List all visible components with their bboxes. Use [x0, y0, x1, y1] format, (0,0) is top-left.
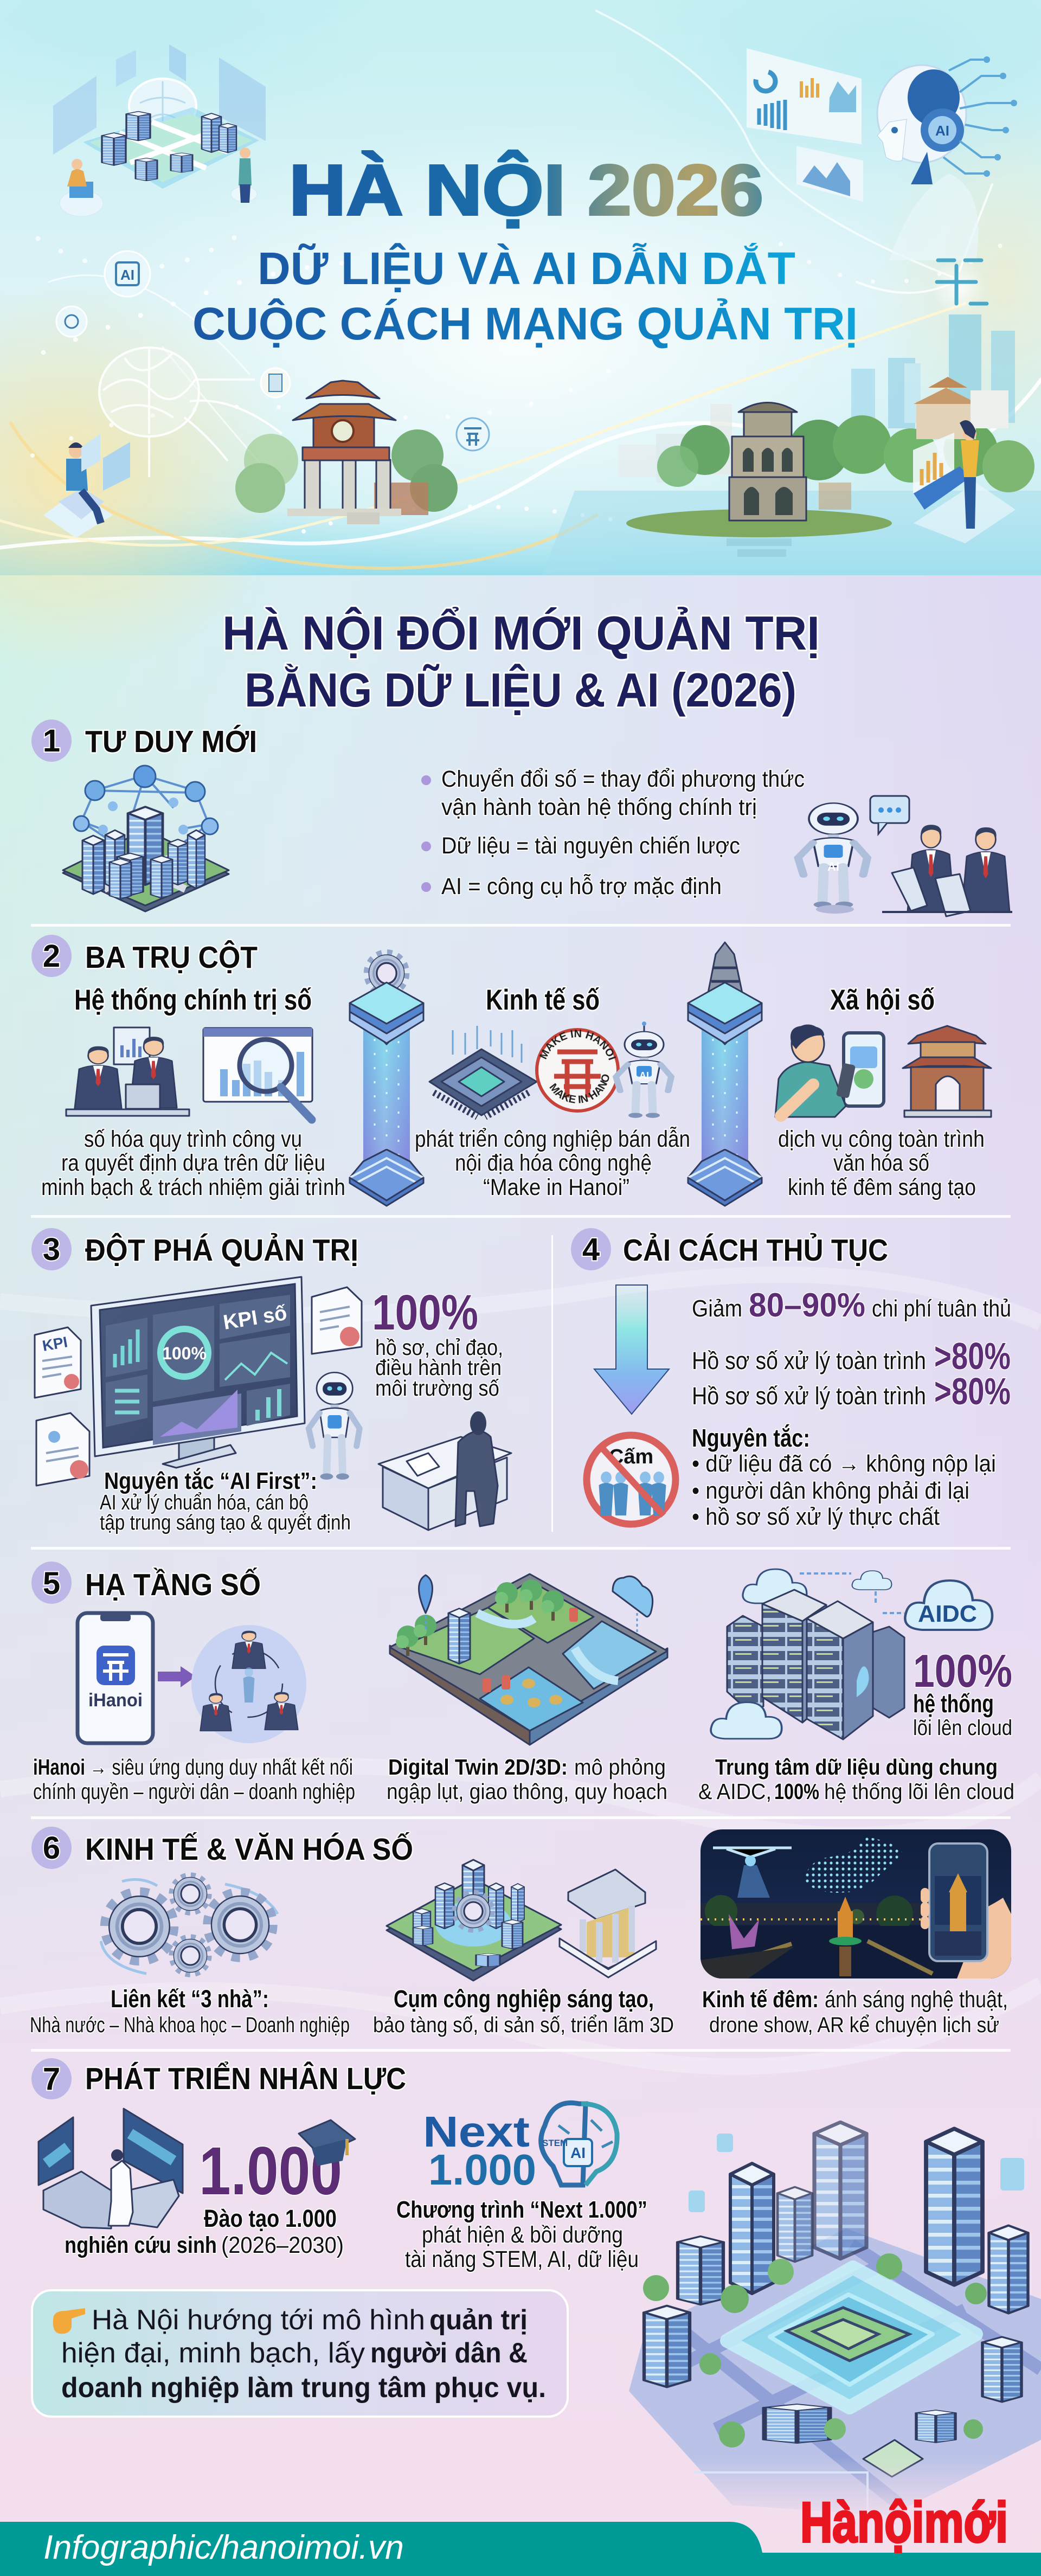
column 1: Hệ thống chính trị số — [41, 984, 345, 1200]
caption: Digital Twin: mô phỏng — [574, 1755, 666, 1780]
icon: digital twin city map — [390, 1574, 667, 1745]
stamp: Make in Hanoi: MAKE IN HANOI — [539, 1030, 616, 1061]
caption: night economy — [702, 1987, 1008, 2037]
subheading: Kinh tế số — [486, 984, 600, 1016]
subheading: Xã hội số — [830, 984, 935, 1016]
section 6: Kinh tế & văn hóa số — [30, 1827, 1011, 2037]
icon: chart window with magnifier — [203, 1028, 312, 1120]
description: số hóa quy trình công vụ — [84, 1126, 302, 1152]
icon: digital museum — [560, 1870, 656, 1977]
section 5: Hạ tầng số — [31, 1562, 1014, 1804]
hero skyscrapers — [851, 314, 1015, 428]
heading 1 — [31, 720, 257, 762]
hero water and Turtle Tower — [542, 377, 1041, 575]
stat: 100%: môi trường số — [375, 1376, 499, 1401]
heading 5: 5 — [43, 1566, 60, 1601]
main heading: BẰNG DỮ LIỆU & AI (2026) — [245, 663, 796, 717]
text: AI First principle: tập trung sáng tạo & quyết định — [100, 1511, 351, 1534]
footer credit: Infographic/hanoimoi.vn — [43, 2529, 404, 2566]
photo: night economy at Hoan Kiem lake — [701, 1829, 1011, 1978]
description — [41, 1126, 345, 1200]
description: văn hóa số — [833, 1150, 929, 1176]
icon: prohibition sign: Cấm — [609, 1446, 653, 1468]
caption: iHanoi: iHanoi — [33, 1755, 85, 1780]
bullet list — [421, 766, 805, 900]
heading 3 — [31, 1228, 358, 1270]
text: AI First principle: AI xử lý chuẩn hóa, cán bộ — [100, 1491, 309, 1514]
caption: Next 1.000 program: Chương trình “Next 1.000” — [396, 2196, 647, 2223]
bullet list: Chuyển đổi số = thay đổi phương thức — [441, 766, 805, 792]
stat: 100%: điều hành trên — [375, 1355, 502, 1380]
caption: data centre: hệ thống lõi lên cloud — [824, 1779, 1014, 1804]
hero subtitle line 2: CUỘC CÁCH MẠNG QUẢN TRỊ — [192, 298, 858, 349]
stat: digital records line 2: Hồ sơ số xử lý toàn trình — [692, 1382, 926, 1410]
description — [778, 1126, 985, 1200]
cloud badge: AIDC: AIDC — [918, 1601, 977, 1627]
hero illustration: smart city platform with brain — [53, 44, 266, 189]
icon: robot beside monitor — [309, 1372, 359, 1480]
icon: data centre servers and clouds — [711, 1569, 992, 1739]
icon: officer at desk — [378, 1411, 511, 1530]
stat: 1.000 PhD candidates: 1.000 — [199, 2134, 342, 2209]
caption: Digital Twin: Digital Twin 2D/3D: — [388, 1755, 568, 1780]
vertical divider — [551, 1235, 553, 1532]
hero title: HÀ NỘI 2026: HÀ NỘI 2026 — [289, 150, 763, 230]
stat: 1.000 PhD candidates: Đào tạo 1.000 — [204, 2205, 337, 2232]
hero small floating icons: AI — [120, 267, 134, 283]
callout: conclusion: doanh nghiệp làm trung tâm phục vụ. — [61, 2372, 546, 2404]
illustration: smart city — [629, 2122, 1041, 2516]
text: principles: Nguyên tắc: — [692, 1424, 810, 1452]
stat: 100% core systems on cloud: lõi lên cloud — [913, 1716, 1012, 1740]
section 2: Ba trụ cột — [31, 935, 992, 1207]
hero flowing light ribbons — [0, 11, 1041, 568]
description: ra quyết định dựa trên dữ liệu — [61, 1150, 325, 1176]
text: principles: • dữ liệu đã có → không nộp lại — [692, 1450, 996, 1477]
hero person with tablet, bottom right — [913, 420, 1016, 543]
main heading — [222, 606, 820, 717]
heading 2 — [31, 935, 258, 977]
stat: compliance cost — [692, 1287, 1011, 1324]
stat: digital records line 1 — [692, 1335, 1011, 1377]
main heading: HÀ NỘI ĐỔI MỚI QUẢN TRỊ — [222, 606, 820, 660]
icon: robot: AI — [639, 1070, 649, 1081]
hero illustration: AI robot head: AI — [935, 123, 949, 139]
logo: Next 1.000: STEM — [542, 2138, 568, 2148]
text: principles: • người dân không phải đi lại — [692, 1477, 969, 1504]
heading 5: HẠ TẦNG SỐ — [85, 1567, 261, 1602]
icon: citizen with phone — [775, 1025, 884, 1117]
heading 6 — [31, 1827, 413, 1869]
caption: night economy: Kinh tế đêm: — [702, 1987, 819, 2013]
caption: three-party link: Nhà nước – Nhà khoa học – Doanh nghiệp — [30, 2013, 350, 2037]
caption: Next 1.000 program: phát hiện & bồi dưỡng — [422, 2222, 623, 2248]
caption: data centre: & AIDC, — [698, 1779, 772, 1804]
icon: prohibition sign — [587, 1435, 676, 1524]
hero illustration: analytics dashboards — [747, 48, 863, 202]
heading 6: 6 — [43, 1830, 60, 1866]
callout: conclusion: quản trị — [429, 2304, 528, 2336]
description: phát triển công nghiệp bán dẫn — [415, 1126, 690, 1152]
caption: night economy: drone show, AR kể chuyện lịch sử — [709, 2013, 999, 2037]
caption: data centre: 100% — [774, 1779, 819, 1804]
icon: Temple of Literature gate — [903, 1026, 991, 1117]
bullet list: vận hành toàn hệ thống chính trị — [441, 794, 757, 820]
stat: 100% core systems on cloud: hệ thống — [913, 1690, 994, 1718]
divider — [31, 924, 1011, 927]
stat: 1.000 PhD candidates: (2026–2030) — [221, 2232, 344, 2258]
arrow: iHanoi to people — [158, 1666, 196, 1687]
caption: creative cluster: bảo tàng số, di sản số, triển lãm 3D — [373, 2013, 674, 2037]
heading 2: 2 — [43, 939, 60, 974]
logo: Next 1.000 — [423, 2103, 617, 2194]
callout: conclusion: Hà Nội hướng tới mô hình — [92, 2304, 425, 2336]
description: “Make in Hanoi” — [483, 1174, 629, 1200]
heading 5 — [31, 1562, 261, 1604]
icon: robot with two officials — [798, 796, 1012, 916]
bullet list: AI = công cụ hỗ trợ mặc định — [441, 873, 722, 900]
icon: KPI dashboard monitor — [91, 1277, 305, 1468]
divider — [31, 1816, 1011, 1819]
pillar with Turtle Tower — [688, 942, 762, 1206]
icon: KPI documents: KPI — [41, 1333, 69, 1354]
icon: officials at laptop — [66, 1027, 189, 1116]
text: principles — [692, 1424, 996, 1530]
heading 4: 4 — [582, 1232, 600, 1267]
hero banner — [0, 0, 1041, 672]
hero temple: Khue Van Cac — [235, 381, 458, 524]
caption: Next 1.000 program — [396, 2196, 647, 2272]
icon: KPI dashboard monitor: 100% — [162, 1344, 207, 1363]
icon: iHanoi phone: iHanoi — [88, 1690, 143, 1711]
stamp: Make in Hanoi — [535, 1028, 620, 1113]
logo: Next 1.000: Next — [423, 2108, 530, 2156]
callout: conclusion — [32, 2290, 568, 2417]
hero small floating icons — [56, 251, 489, 451]
subheading: Hệ thống chính trị số — [74, 984, 312, 1016]
divider — [31, 1547, 1011, 1550]
icon: robot with two officials: AI — [827, 860, 839, 873]
divider — [31, 2049, 1011, 2052]
heading 7: PHÁT TRIỂN NHÂN LỰC — [85, 2061, 406, 2096]
hero icon: chip circuit glow — [931, 260, 987, 314]
heading 2: BA TRỤ CỘT — [85, 940, 258, 975]
caption: creative cluster: Cụm công nghiệp sáng tạo, — [394, 1985, 654, 2013]
stat: 100% — [372, 1285, 503, 1401]
hero person on cube, bottom left — [43, 434, 130, 538]
icon: robot — [616, 1022, 671, 1118]
heading 4 — [571, 1228, 888, 1270]
icon: graduation cap — [299, 2120, 355, 2166]
section 1: Tư duy mới — [31, 720, 1012, 916]
caption: three-party link — [30, 1985, 350, 2037]
description: nội địa hóa công nghệ — [455, 1150, 652, 1176]
stat: 100% core systems on cloud: 100% — [913, 1646, 1012, 1697]
icon: pointing hand — [53, 2308, 85, 2334]
section 3: Đột phá quản trị — [31, 1228, 511, 1534]
heading 6: KINH TẾ & VĂN HÓA SỐ — [85, 1832, 413, 1867]
icon: creative industry cluster — [387, 1860, 561, 1981]
stat: 100%: 100% — [372, 1285, 478, 1340]
icon: KPI documents — [35, 1287, 362, 1486]
icon: researcher in lab — [38, 2109, 183, 2228]
pillar with gear — [350, 952, 423, 1206]
text: AI First principle: Nguyên tắc “AI First”: — [104, 1467, 317, 1494]
icon: networked smart city — [63, 766, 229, 911]
stat: digital records line 1: >80% — [934, 1335, 1011, 1377]
stamp: Make in Hanoi: MAKE IN HANOI — [549, 1075, 609, 1103]
logo: Next 1.000: 1.000 — [428, 2145, 536, 2194]
heading 4: CẢI CÁCH THỦ TỤC — [623, 1232, 888, 1268]
heading 1: TƯ DUY MỚI — [85, 724, 257, 759]
hero subtitle line 1: DỮ LIỆU VÀ AI DẪN DẮT — [258, 243, 795, 294]
icon: semiconductor chip — [429, 1026, 537, 1117]
heading 1: 1 — [43, 723, 60, 759]
caption: iHanoi: chính quyền – người dân – doanh nghiệp — [33, 1779, 355, 1804]
caption: iHanoi: → siêu ứng dụng duy nhất kết nối — [89, 1755, 353, 1780]
caption: three-party link: Liên kết “3 nhà”: — [111, 1985, 269, 2013]
heading 7 — [31, 2058, 406, 2099]
logo: Next 1.000: AI — [570, 2144, 586, 2161]
description: kinh tế đêm sáng tạo — [788, 1174, 976, 1200]
stat: 100% core systems on cloud — [913, 1646, 1012, 1740]
heading 3: 3 — [43, 1232, 60, 1267]
icon: KPI dashboard monitor: KPI số — [222, 1302, 288, 1334]
heading 7: 7 — [43, 2061, 60, 2097]
callout: conclusion: người dân & — [370, 2337, 528, 2369]
text: AI First principle — [100, 1467, 351, 1534]
stat: digital records line 1: Hồ sơ số xử lý toàn trình — [692, 1347, 926, 1374]
stat: digital records line 2 — [692, 1370, 1011, 1412]
callout: conclusion: hiện đại, minh bạch, lấy — [61, 2337, 365, 2369]
icon: government, citizens, business circle — [191, 1625, 306, 1743]
caption: data centre — [698, 1755, 1014, 1804]
stat: compliance cost: Giảm — [692, 1295, 742, 1322]
bullet list: Dữ liệu = tài nguyên chiến lược — [441, 833, 740, 859]
caption: creative cluster — [373, 1985, 674, 2037]
divider — [31, 1215, 1011, 1218]
hero people at top left — [60, 147, 257, 216]
section 4: Cải cách thủ tục — [571, 1228, 1011, 1530]
caption: Digital Twin — [387, 1755, 667, 1804]
description: dịch vụ công toàn trình — [778, 1126, 985, 1152]
column 3: Xã hội số — [775, 984, 991, 1200]
stat: compliance cost: 80–90% — [749, 1287, 865, 1324]
stat: 1.000 PhD candidates: nghiên cứu sinh — [65, 2232, 217, 2258]
heading 3: ĐỘT PHÁ QUẢN TRỊ — [85, 1232, 358, 1268]
column 2: Kinh tế số — [415, 984, 690, 1200]
description — [415, 1126, 690, 1200]
text: principles: • hồ sơ số xử lý thực chất — [692, 1504, 940, 1530]
icon: iHanoi phone — [78, 1613, 153, 1743]
arrow: reduction — [594, 1285, 669, 1414]
cloud badge: AIDC — [905, 1581, 992, 1630]
stat: 1.000 PhD candidates — [65, 2134, 344, 2258]
caption: night economy: ánh sáng nghệ thuật, — [825, 1987, 1008, 2013]
icon: three-party gears — [101, 1875, 278, 1975]
stat: digital records line 2: >80% — [934, 1370, 1011, 1412]
hero illustration: AI robot head — [877, 56, 1017, 260]
footer band — [0, 2522, 1041, 2576]
description: minh bạch & trách nhiệm giải trình — [41, 1174, 345, 1200]
hero glowing brain — [99, 347, 282, 477]
stat: 100%: hồ sơ, chỉ đạo, — [375, 1335, 503, 1360]
caption: iHanoi — [33, 1755, 355, 1804]
stat: compliance cost: chi phí tuân thủ — [872, 1295, 1011, 1322]
caption: Next 1.000 program: tài năng STEM, AI, dữ liệu — [405, 2246, 639, 2272]
section 7: Phát triển nhân lực — [31, 2058, 647, 2272]
caption: data centre: Trung tâm dữ liệu dùng chung — [715, 1755, 998, 1780]
caption: Digital Twin: ngập lụt, giao thông, quy hoạch — [387, 1779, 667, 1804]
